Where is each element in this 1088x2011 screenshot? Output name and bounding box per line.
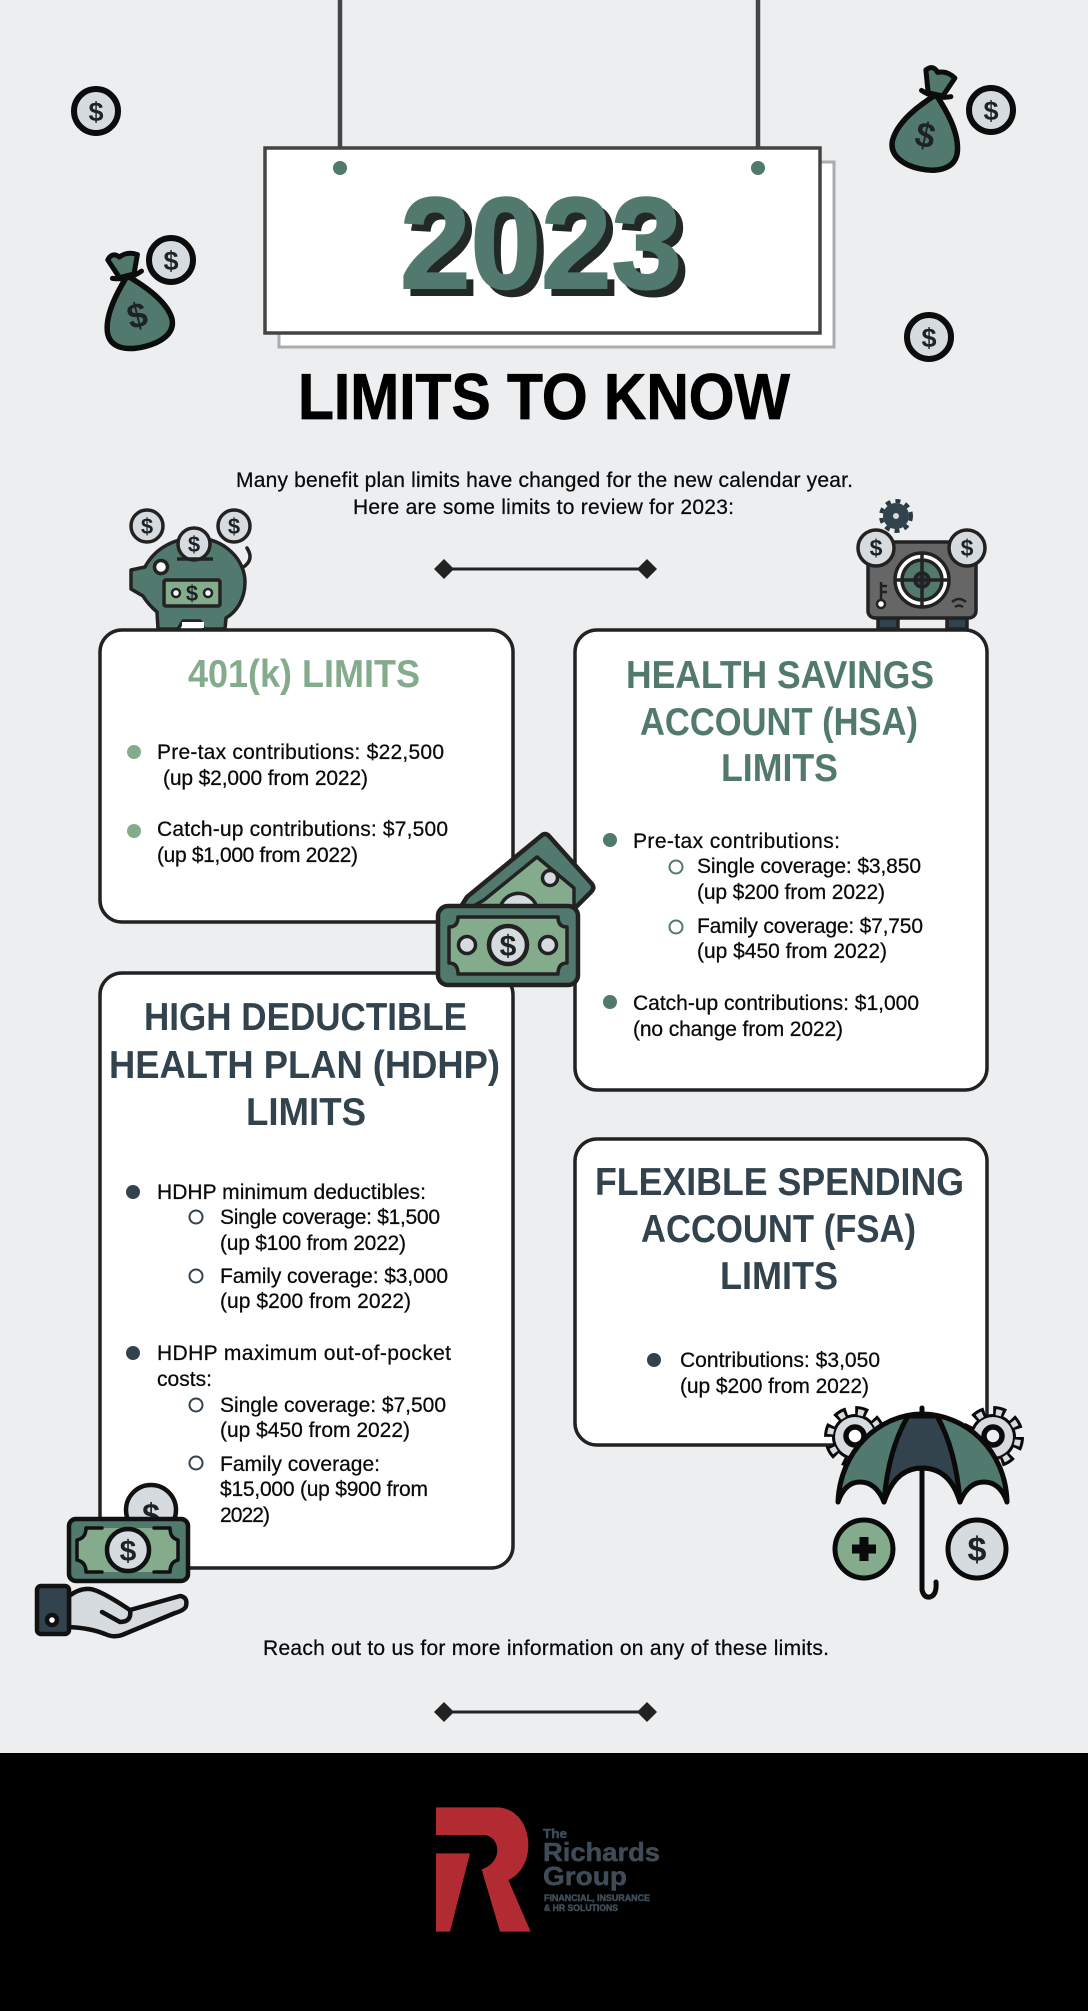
list: HDHP items: 2022): [220, 1504, 270, 1527]
list: HDHP items: $15,000 (up $900 from: [220, 1478, 428, 1501]
icon: coin top left: [74, 89, 118, 133]
list: HSA items: (no change from 2022): [633, 1018, 843, 1041]
intro text: Many benefit plan limits have changed for the new calendar year.: [236, 469, 853, 492]
icon: money bag and coin top right: $: [983, 96, 999, 126]
list: HSA items: Catch-up contributions: $1,000: [633, 992, 919, 1015]
icon: hand holding money: [37, 1485, 188, 1636]
icon: safe: [858, 501, 985, 629]
logo wordmark: Richards: [543, 1837, 660, 1867]
list: HDHP items: HDHP minimum deductibles:: [157, 1181, 426, 1204]
icon: safe: $: [961, 535, 974, 561]
list: 401(k) items: (up $2,000 from 2022): [163, 767, 368, 790]
year heading 2023: 2023: [400, 170, 682, 316]
icon: piggy bank: [131, 510, 250, 629]
list: HDHP items: Single coverage: $7,500: [220, 1394, 446, 1417]
divider top: [434, 559, 657, 579]
heading: HSA limits: ACCOUNT (HSA): [640, 701, 918, 744]
logo wordmark: FINANCIAL, INSURANCE: [544, 1893, 650, 1903]
closing text: Reach out to us for more information on any of these limits.: [263, 1637, 829, 1660]
heading: HSA limits: HEALTH SAVINGS: [626, 654, 934, 697]
hanging sign: [265, 0, 834, 347]
heading: FSA limits: LIMITS: [720, 1255, 838, 1298]
logo wordmark: The: [543, 1826, 567, 1841]
list: 401(k) items: [127, 741, 448, 867]
list: 401(k) items: Catch-up contributions: $7,500: [157, 818, 448, 841]
heading: limits to know: LIMITS TO KNOW: [298, 360, 791, 433]
year heading 2023: 2023: [407, 177, 689, 323]
icon: safe: $: [870, 535, 883, 561]
list: HDHP items: [126, 1181, 451, 1527]
list: HDHP items: HDHP maximum out-of-pocket: [157, 1342, 451, 1365]
intro text: Here are some limits to review for 2023:: [353, 496, 734, 519]
icon: hand holding money: $: [142, 1497, 160, 1533]
icon: money bag and coin left: $: [123, 295, 151, 337]
icon: money bag and coin left: $: [163, 246, 179, 276]
logo wordmark: [543, 1826, 660, 1913]
logo: The Richards Group: [436, 1807, 660, 1932]
icon: umbrella with gears and coins: $: [968, 1531, 987, 1569]
logo wordmark: Group: [543, 1861, 627, 1891]
list: HDHP items: Single coverage: $1,500: [220, 1206, 440, 1229]
icon: piggy bank: $: [141, 514, 153, 539]
list: HDHP items: Family coverage:: [220, 1453, 380, 1476]
heading: HDHP limits: [109, 996, 500, 1134]
list: FSA items: (up $200 from 2022): [680, 1375, 869, 1398]
list: HSA items: Single coverage: $3,850: [697, 855, 921, 878]
divider bottom: [434, 1702, 657, 1722]
heading: 401(k) limits: 401(k) LIMITS: [188, 653, 420, 696]
icon: piggy bank: $: [186, 581, 198, 606]
list: HDHP items: costs:: [157, 1368, 212, 1391]
icon: coin top left: $: [88, 97, 104, 127]
heading: HDHP limits: HEALTH PLAN (HDHP): [109, 1044, 500, 1087]
icon: money bag and coin top right: $: [912, 115, 939, 157]
icon: coin right: $: [921, 323, 937, 353]
list: HDHP items: (up $100 from 2022): [220, 1232, 406, 1255]
list: 401(k) items: Pre-tax contributions: $22,500: [157, 741, 444, 764]
heading: HSA limits: LIMITS: [721, 747, 838, 790]
list: HSA items: Pre-tax contributions:: [633, 830, 840, 853]
icon: money bag and coin top right: [888, 63, 1013, 176]
panel: flexible spending account limits: [575, 1139, 987, 1445]
icon: piggy bank: $: [228, 514, 240, 539]
heading: FSA limits: FLEXIBLE SPENDING: [595, 1161, 964, 1204]
heading: FSA limits: ACCOUNT (FSA): [641, 1208, 916, 1251]
footer band: [0, 1753, 1088, 2011]
icon: stack of bills: $: [500, 930, 517, 963]
intro text: [236, 469, 853, 519]
list: FSA items: Contributions: $3,050: [680, 1349, 880, 1372]
list: HDHP items: (up $450 from 2022): [220, 1419, 410, 1442]
heading: FSA limits: [595, 1161, 964, 1298]
panel: high deductible health plan limits: [100, 973, 513, 1568]
heading: HSA limits: [626, 654, 934, 790]
list: HSA items: (up $450 from 2022): [697, 940, 887, 963]
list: HSA items: (up $200 from 2022): [697, 881, 885, 904]
heading: HDHP limits: LIMITS: [246, 1091, 366, 1134]
panel: 401(k) limits: [100, 630, 513, 922]
heading: HDHP limits: HIGH DEDUCTIBLE: [144, 996, 467, 1039]
icon: hand holding money: $: [120, 1535, 137, 1568]
list: HSA items: Family coverage: $7,750: [697, 915, 923, 938]
icon: stack of bills: [438, 834, 593, 985]
icon: umbrella with gears and coins: [829, 1408, 1019, 1597]
logo mark: [436, 1807, 531, 1932]
icon: coin right: [907, 315, 951, 359]
icon: piggy bank: $: [188, 532, 200, 557]
logo wordmark: & HR SOLUTIONS: [544, 1903, 618, 1913]
list: FSA items: [647, 1349, 880, 1398]
list: HSA items: [603, 830, 923, 1041]
panel: health savings account limits: [575, 630, 987, 1090]
icon: money bag and coin left: [89, 238, 193, 355]
list: HDHP items: (up $200 from 2022): [220, 1290, 411, 1313]
list: 401(k) items: (up $1,000 from 2022): [157, 844, 358, 867]
list: HDHP items: Family coverage: $3,000: [220, 1265, 448, 1288]
